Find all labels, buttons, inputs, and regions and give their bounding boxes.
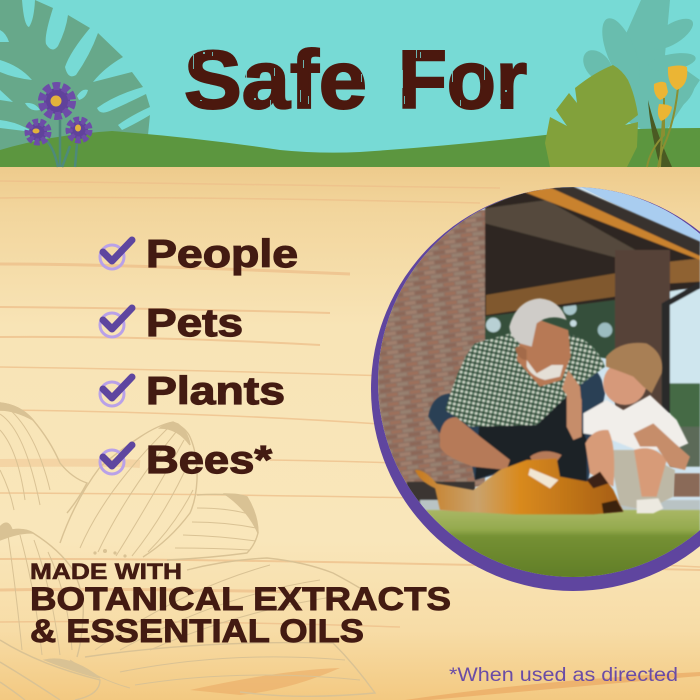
yellow tulips <box>647 66 687 167</box>
petal: large bottom right <box>0 558 375 700</box>
item: Bees <box>100 439 273 482</box>
wood background <box>0 167 700 700</box>
item: Bees: Bees* <box>146 439 273 482</box>
green hill <box>0 128 700 167</box>
purple ring <box>371 187 700 591</box>
man <box>428 298 605 488</box>
flower line art watermark <box>0 403 375 700</box>
background trees <box>485 290 700 467</box>
purple flowers <box>28 86 89 167</box>
footnote: *When used as directed <box>449 665 678 686</box>
pillar and frame <box>615 250 670 413</box>
petal: upper left <box>0 403 87 513</box>
header banner <box>0 0 700 167</box>
petal: top centre <box>60 422 197 557</box>
item: Plants <box>100 370 285 413</box>
title: For <box>398 33 527 126</box>
petal: lower left <box>0 523 83 657</box>
brick wall <box>360 210 485 487</box>
item: Pets: Pets <box>146 302 243 345</box>
item: People: People <box>146 233 298 276</box>
photo scene <box>378 187 700 577</box>
sky <box>0 0 700 167</box>
sky top <box>581 187 700 246</box>
dog <box>415 458 623 514</box>
ground <box>420 500 700 513</box>
title <box>184 33 527 126</box>
made with text block <box>30 559 451 649</box>
made with text block: MADE WITH <box>30 559 182 584</box>
petal: right <box>167 494 258 560</box>
grass foreground blur <box>448 532 698 577</box>
title grunge speckles <box>193 50 507 107</box>
checklist <box>100 233 298 482</box>
title: Safe <box>184 33 367 126</box>
made with text block: & ESSENTIAL OILS <box>30 613 364 649</box>
boy <box>562 343 690 513</box>
made with text block: BOTANICAL EXTRACTS <box>30 581 451 617</box>
flower centre stamens <box>93 549 127 558</box>
porch ceiling <box>485 187 700 317</box>
item: People <box>100 233 298 276</box>
blurred grass <box>426 509 700 577</box>
item: Plants: Plants <box>146 370 285 413</box>
teal background leaves <box>577 0 700 140</box>
roof <box>523 187 700 260</box>
large green leaf <box>545 65 638 167</box>
circular photo <box>360 180 700 600</box>
item: Pets <box>100 302 243 345</box>
monstera leaf <box>0 0 150 155</box>
